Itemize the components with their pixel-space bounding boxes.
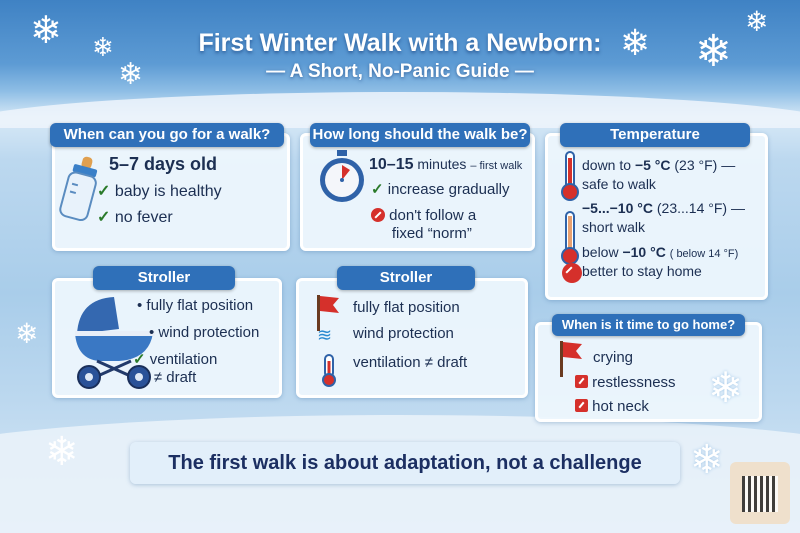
snow hill bottom [0,415,800,533]
icon: snowflake: ❄ [708,364,743,411]
header: go home [552,314,745,336]
header: temperature: Temperature [610,126,700,143]
panel: stroller 2 [296,278,528,398]
panel: stroller 1 [52,278,282,398]
icon: stop [562,263,582,283]
snowflakes decoration: ❄ [30,10,62,52]
panel: temperature: −5...−10 °C (23...14 °F) — [582,200,745,216]
panel: when can you go: ✓ no fever [97,209,173,226]
header: stroller 1: Stroller [138,269,190,286]
icon: wind: ≋ [317,325,332,345]
QR code [730,462,790,524]
panel: go home: crying [593,349,633,366]
snowflakes decoration: ❄ [695,27,732,76]
panel: temperature: safe to walk [582,176,656,192]
panel: stroller 1: ✓ ventilation [133,351,217,368]
header: stroller 2: Stroller [380,269,432,286]
panel: stroller 2: fully flat position [353,299,460,316]
panel: how long: fixed “norm” [392,225,472,242]
header: when [50,123,284,147]
snowflakes decoration: ❄ [92,32,114,62]
panel: stroller 1: • wind protection [149,324,259,341]
panel: how long: 10–15 minutes – first walk [369,156,522,173]
subtitle: — A Short, No-Panic Guide — [266,61,534,82]
panel: go home: hot neck [592,398,649,415]
icon: stopwatch [320,150,364,202]
snowflakes decoration: ❄ [745,6,768,37]
text: days: 5–7 days old [109,154,217,174]
snowflakes decoration: ❄ [620,22,650,63]
panel: stroller 1: • fully flat position [137,297,253,314]
snowflakes decoration: ❄ [15,318,38,349]
panel: when can you go [52,133,290,251]
panel: go home [535,322,762,422]
icon: thermometer [322,354,336,387]
panel: how long: ✓ increase gradually [371,181,509,198]
header: go home: When is it time to go home? [562,317,735,332]
snowflakes decoration: ❄ [118,58,143,91]
panel: temperature: better to stay home [582,263,702,279]
icon: flag [317,295,339,331]
panel: stroller 2: wind protection [353,325,454,342]
panel: stroller 1: ≠ draft [154,369,196,386]
header: how long [310,123,530,147]
snowflakes decoration: ❄ [690,438,724,482]
title: First Winter Walk with a Newborn: [198,29,602,57]
panel: temperature: short walk [582,219,645,235]
panel: stroller 2: ventilation ≠ draft [353,354,467,371]
panel: go home: restlessness [592,374,676,391]
panel: how long: don't follow a [389,207,476,224]
panel: temperature [545,133,768,300]
header: stroller 1 [93,266,235,290]
snowflakes decoration: ❄ [45,430,79,474]
panel: when can you go: ✓ baby is healthy [97,183,222,200]
header: stroller 2 [337,266,475,290]
header: how long: How long should the walk be? [312,126,528,143]
icon: stroller [75,297,152,389]
bottom banner: The first walk is about adaptation, not a challenge [168,452,642,474]
icon: thermometers [561,151,579,264]
panel: temperature: down to −5 °C (23 °F) — [582,157,735,173]
panel: how long [300,133,535,251]
snow hill top [0,92,800,128]
bottom banner [130,442,680,484]
panel: temperature: below −10 °C ( below 14 °F) [582,244,738,260]
header: temperature [560,123,750,147]
icon: flag [560,341,582,377]
header: when: When can you go for a walk? [64,126,270,143]
icon: bottle [59,156,98,221]
